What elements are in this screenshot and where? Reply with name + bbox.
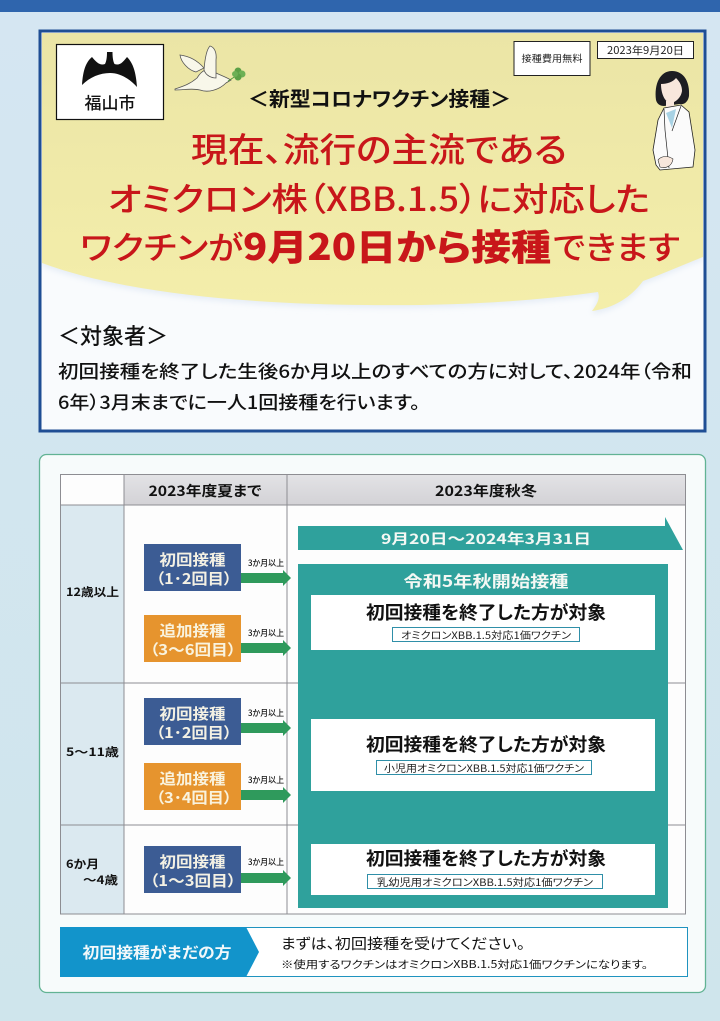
arrow: 3 months (row 1a) xyxy=(241,557,291,586)
box: primary 1-2 (5-11): 初回接種 xyxy=(160,703,226,724)
free of charge box xyxy=(514,42,590,76)
icon: dove with clover xyxy=(175,46,246,91)
target box: 6m-4: 初回接種を終了した方が対象 xyxy=(366,845,606,871)
panel: main announcement xyxy=(40,31,705,431)
arrow: 3 months (row 2a): 3か月以上 xyxy=(248,707,284,719)
yellow speech bubble xyxy=(42,33,703,311)
box: booster 3-4 (5-11) xyxy=(144,763,241,810)
callout: not yet vaccinated: 初回接種がまだの方 xyxy=(82,941,232,963)
target box: 5-11: 初回接種を終了した方が対象 xyxy=(366,731,606,757)
target box: 6m-4: 乳幼児用オミクロンXBB.1.5対応1価ワクチン xyxy=(377,874,594,889)
arrow: 3 months (row 2a) xyxy=(241,707,291,736)
column header: until summer: 2023年度夏まで xyxy=(148,481,262,501)
arrow: 3 months (row 1b) xyxy=(241,627,291,656)
target box: 6m-4 xyxy=(311,844,655,895)
box: primary 1-2 (5-11) xyxy=(144,698,241,745)
row label: 6 months to 4: 6か月 xyxy=(66,856,99,872)
free of charge box: 接種費用無料 xyxy=(522,51,583,65)
logo box: Fukuyama City xyxy=(56,44,164,120)
box: primary 1-3 (6m-4) xyxy=(144,846,241,893)
box: primary 1-2 (5-11): （1･2回目） xyxy=(156,722,232,743)
target box: 12+: 初回接種を終了した方が対象 xyxy=(366,599,606,625)
row label: 6 months to 4 xyxy=(66,856,119,888)
block heading: 令和5年秋開始接種 xyxy=(404,568,568,592)
panel: vaccination schedule xyxy=(40,454,706,992)
box: booster 3-6 (12+): （3～6回目） xyxy=(150,639,236,660)
title: オミクロン株（XBB.1.5）に対応した xyxy=(108,173,650,221)
box: primary 1-2 (12+): （1･2回目） xyxy=(156,568,232,589)
subtitle: ＜新型コロナワクチン接種＞ xyxy=(248,83,511,112)
box: booster 3-6 (12+): 追加接種 xyxy=(160,620,226,641)
box: booster 3-4 (5-11): 追加接種 xyxy=(160,768,226,789)
date box: 2023年9月20日 xyxy=(607,43,684,58)
icon: doctor illustration xyxy=(653,71,695,170)
title: ワクチンが xyxy=(80,223,244,269)
title xyxy=(80,123,680,271)
row label: 6 months to 4: ～4歳 xyxy=(83,872,119,888)
period arrow band xyxy=(298,517,683,550)
column header: autumn: 2023年度秋冬 xyxy=(435,481,537,501)
city name: 福山市 xyxy=(84,90,136,114)
target box: 5-11: 小児用オミクロンXBB.1.5対応1価ワクチン xyxy=(384,760,585,775)
box: primary 1-2 (12+): 初回接種 xyxy=(160,549,226,570)
arrow: 3 months (row 2b): 3か月以上 xyxy=(248,774,284,786)
box: primary 1-2 (12+) xyxy=(144,544,241,591)
box: booster 3-4 (5-11): （3･4回目） xyxy=(156,787,232,808)
title: 9月20日から接種 xyxy=(243,219,551,271)
row label: 12 and over: 12歳以上 xyxy=(66,584,120,600)
arrow: 3 months (row 3): 3か月以上 xyxy=(248,856,284,868)
arrow: 3 months (row 1a): 3か月以上 xyxy=(248,557,284,569)
target description: 初回接種を終了した生後6か月以上のすべての方に対して、2024年（令和 xyxy=(58,358,692,384)
box: primary 1-3 (6m-4): （1～3回目） xyxy=(150,870,236,891)
callout: not yet vaccinated xyxy=(60,927,688,977)
autumn vaccination block xyxy=(298,564,668,908)
target description: 6年）3月末までに一人1回接種を行います。 xyxy=(58,389,420,415)
period arrow band: 9月20日～2024年3月31日 xyxy=(381,529,591,549)
callout: not yet vaccinated: ※使用するワクチンはオミクロンXBB.1.5対応1価ワクチンになります。 xyxy=(281,957,648,972)
target box: 12+: オミクロンXBB.1.5対応1価ワクチン xyxy=(401,627,572,642)
target box: 12+ xyxy=(311,595,655,650)
date box xyxy=(598,42,694,58)
schedule table xyxy=(60,474,686,914)
arrow: 3 months (row 1b): 3か月以上 xyxy=(248,627,284,639)
icon: city emblem xyxy=(82,52,137,87)
top blue band xyxy=(0,0,720,12)
arrow: 3 months (row 2b) xyxy=(241,774,291,803)
box: primary 1-3 (6m-4): 初回接種 xyxy=(160,851,226,872)
title: できます xyxy=(553,223,680,269)
arrow: 3 months (row 3) xyxy=(241,856,291,886)
callout: not yet vaccinated: まずは、初回接種を受けてください。 xyxy=(281,933,525,954)
box: booster 3-6 (12+) xyxy=(144,615,241,662)
target description xyxy=(58,358,692,415)
title: 現在、流行の主流である xyxy=(191,123,567,172)
target heading: ＜対象者＞ xyxy=(58,319,168,351)
target box: 5-11 xyxy=(311,719,655,791)
row label: 5 to 11: 5～11歳 xyxy=(66,744,120,760)
